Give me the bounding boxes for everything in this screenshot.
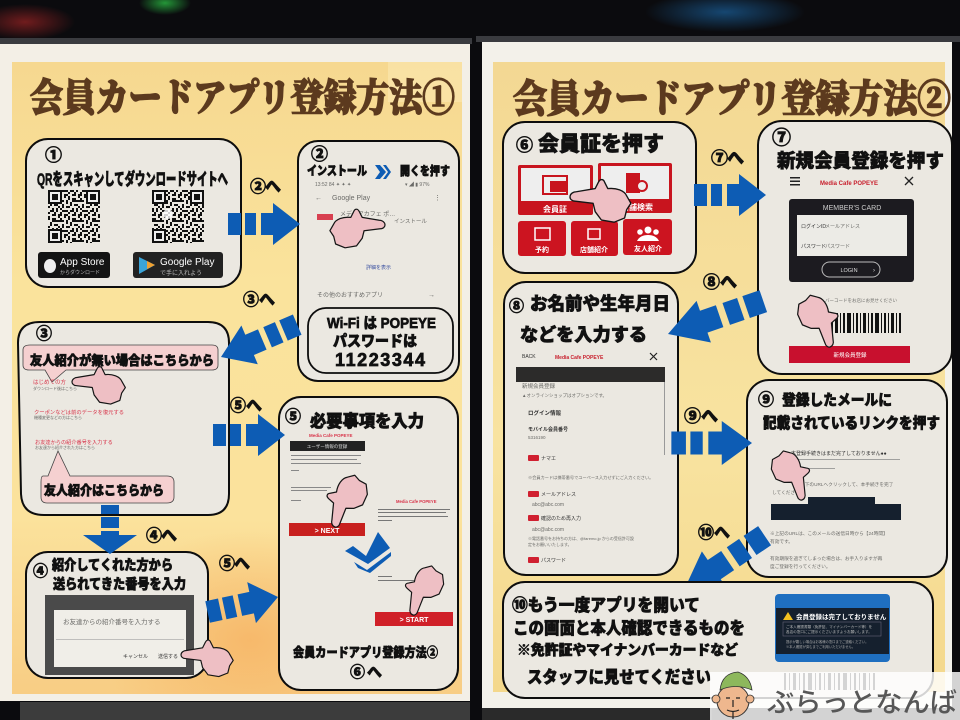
- label: to step 3: ③へ: [243, 291, 275, 309]
- registration form: abc@abc.com: [532, 502, 564, 508]
- app header: [790, 177, 913, 187]
- member card login: パスワード: [825, 244, 850, 250]
- arrow: to step 5 from step 3: [213, 414, 285, 456]
- hand pointer: start: [399, 561, 447, 621]
- heading: press open: 開くを押す: [400, 163, 450, 178]
- hand pointer: [330, 209, 385, 248]
- registration form: 定をお願いいたします。: [528, 541, 572, 547]
- badge: Google Play: Google Play: [160, 257, 214, 268]
- arrow: to step 9: [671, 421, 752, 465]
- registration form: ナマエ: [541, 456, 556, 462]
- dialog screenshot: 送信する: [158, 653, 178, 660]
- arrow: to step 8: [661, 280, 770, 355]
- hand pointer: [72, 367, 125, 404]
- menu list: クーポンなどは前のデータを復元する: [34, 408, 124, 416]
- label: to step 4: ④へ: [146, 527, 177, 545]
- label: to step 5: ⑤へ: [230, 397, 262, 415]
- registration form: 確認のため再入力: [541, 515, 581, 522]
- step number 9: ⑨: [758, 391, 774, 409]
- registration form: ※会員カードは携帯番号でユーペース入力せずにご入力ください。: [528, 474, 653, 481]
- QR code: App Store: [48, 190, 100, 243]
- screenshot: Google Play: インストール: [394, 218, 427, 225]
- registration form: ログイン情報: [528, 409, 562, 417]
- step number 2: ②: [311, 145, 328, 164]
- registration form: 5316190: [528, 435, 546, 440]
- screenshot: Google Play: 13:52 84 ✦ ✦ ✦: [315, 182, 351, 188]
- callout: friend referral: 友人紹介はこちらから: [44, 483, 164, 498]
- heading: enter name: お名前や生年月日: [530, 293, 670, 314]
- screenshot: user form: Media Cafe POPEYE: [309, 433, 353, 438]
- screenshot: Google Play: [315, 182, 441, 299]
- member card login: LOGIN: [840, 268, 858, 274]
- blue card: registration incomplete: 各店の窓口にご提示くださいますようお願いします。: [786, 629, 872, 634]
- panel 9: press email link: [747, 380, 947, 577]
- email screenshot: ●●本登録手続きはまだ完了しておりません●●: [785, 450, 887, 457]
- callout: Wi-Fi password: 11223344: [335, 350, 425, 370]
- registration form: メールアドレス: [541, 492, 576, 498]
- link label: to step 6: ⑥へ: [350, 664, 382, 681]
- dialog screenshot: キャンセル: [123, 654, 148, 660]
- callout: Wi-Fi password: Wi-Fi は POPEYE: [327, 315, 436, 332]
- text: show screen and ID: この画面と本人確認できるものを: [513, 618, 745, 638]
- callout: friend referral: [41, 451, 174, 503]
- heading: enter required fields: 必要事項を入力: [310, 411, 424, 431]
- registration form: モバイル会員番号: [528, 426, 568, 433]
- QR code: Google Play: [152, 190, 204, 243]
- icon: blue chevrons: [375, 165, 391, 179]
- app header: Media Cafe POPEYE: [555, 355, 604, 361]
- heading: enter referral number: 紹介してくれた方から: [52, 557, 173, 573]
- screenshot: Google Play: メディアカフェ ポ…: [340, 210, 395, 218]
- member card login: ログインID: [801, 223, 826, 230]
- app header: BACK: [522, 354, 536, 360]
- registration form: 新規会員登録: [522, 382, 556, 390]
- menu list: はじめての方: [33, 378, 67, 386]
- text: ID examples: ※免許証やマイナンバーカードなど: [517, 642, 738, 658]
- heading: scan QR: QRをスキャンしてダウンロードサイトへ: [37, 169, 228, 189]
- screenshot: start form: Media Cafe POPEYE: [396, 499, 437, 504]
- member card login: [789, 199, 914, 282]
- step number 5: ⑤: [285, 408, 301, 426]
- registration form: ▲オンラインショップはオプションです。: [522, 392, 607, 399]
- menu: store search: 店舗検索: [621, 202, 653, 212]
- button: new registration: [789, 346, 910, 363]
- menu: reservation: 予約: [535, 245, 549, 254]
- callout: Wi-Fi password: [308, 308, 453, 373]
- screenshot: Google Play: 詳細を表示: [366, 264, 391, 271]
- email screenshot: 以下のURLへクリックして、本手続きを完了: [800, 481, 894, 488]
- member card login: ›: [873, 268, 875, 274]
- arrow: to step 2: [228, 203, 300, 245]
- icon: mascot face: [712, 672, 754, 719]
- badge: App Store: からダウンロード: [60, 269, 100, 276]
- label: to step 2: ②へ: [250, 178, 281, 196]
- member card login: パスワード: [801, 244, 826, 250]
- heading: reopen the app: ⑩もう一度アプリを開いて: [512, 595, 700, 615]
- registration form: ※電話番号をお持ちの方は、@faremo.jp からの受信許可設: [528, 535, 634, 541]
- sheet 2 paper: [482, 42, 952, 708]
- logo text: ぶらっとなんば: [767, 688, 957, 718]
- panel 6: press member card: [503, 122, 696, 273]
- app header: [516, 353, 665, 455]
- label: to step 9: ⑨へ: [684, 407, 718, 426]
- menu: store info: [571, 221, 618, 256]
- arrow: to step 7: [694, 174, 766, 216]
- screenshot: Google Play: ▾ ◢ ▮ 97%: [405, 182, 430, 188]
- email screenshot: してください。: [772, 489, 805, 496]
- panel 8: enter name and birthday: などを入力する: [520, 324, 647, 345]
- step number 8: ⑧: [509, 298, 524, 315]
- dialog screenshot: [45, 595, 194, 675]
- menu list: ダウンロード後はこちら: [33, 385, 77, 391]
- email screenshot: 有効期限を過ぎてしまった場合は、お手入りますが再: [770, 555, 883, 562]
- menu list: お友達から紹介された方はこちら: [35, 444, 95, 450]
- hand pointer: [794, 290, 845, 353]
- email screenshot: ※上記のURLは、このメールの送信日時から【24時間】: [770, 530, 888, 537]
- screenshot: start form: > START: [400, 617, 429, 624]
- screenshot: Google Play: Google Play: [332, 195, 371, 202]
- panel 8: enter name and birthday: [504, 282, 678, 575]
- menu list: [33, 378, 124, 450]
- step number 4: ④: [33, 563, 48, 580]
- hand pointer: next: [320, 470, 371, 533]
- arrow: to step 3: [213, 305, 305, 376]
- callout: no referral: [23, 345, 218, 382]
- menu: store info: 店舗紹介: [580, 245, 608, 254]
- heading: press member card: 会員証を押す: [538, 133, 664, 156]
- hand pointer: [181, 640, 233, 677]
- step number 6: ⑥: [516, 136, 533, 155]
- blue card: registration incomplete: [775, 594, 890, 662]
- label: to step 10: ⑩へ: [698, 524, 730, 542]
- menu: member card: 会員証: [543, 204, 567, 214]
- hand pointer: [768, 446, 816, 506]
- sheet 1 paper: [0, 44, 470, 720]
- title: registration method 1: 会員カードアプリ登録方法①: [30, 78, 455, 120]
- badge: Google Play: [133, 252, 223, 278]
- email screenshot: [770, 450, 901, 570]
- menu: member card: [518, 165, 593, 215]
- barcode: [825, 297, 901, 333]
- icon: down chevrons: [345, 532, 391, 573]
- member card login: メールアドレス: [825, 224, 860, 230]
- callout: Wi-Fi password: パスワードは: [333, 332, 417, 350]
- email screenshot: 有効です。: [770, 538, 793, 545]
- step number 7: ⑦: [772, 127, 791, 149]
- panel 1: QR scan: [26, 139, 241, 287]
- screenshot: Google Play: ←: [315, 195, 322, 202]
- screenshot: Google Play: その他のおすすめアプリ: [317, 291, 383, 299]
- blue card: registration incomplete: ※本人確認が済むまでご利用いただけません。: [786, 644, 855, 649]
- step number 1: ①: [45, 146, 62, 165]
- blue card: registration incomplete: 会員登録は完了しておりません: [796, 612, 887, 621]
- menu list: お友達からの紹介番号を入力する: [35, 438, 113, 446]
- registration form: abc@abc.com: [532, 527, 564, 533]
- member card login: MEMBER'S CARD: [823, 205, 881, 212]
- email screenshot: 度ご登録を行ってください。: [770, 563, 831, 570]
- barcode: faded: [784, 673, 875, 690]
- badge: App Store: [38, 252, 110, 278]
- hand pointer: [570, 180, 631, 222]
- dialog screenshot: お友達からの紹介番号を入力する: [63, 617, 160, 626]
- blue card: registration incomplete: ご本人確認書類（免許証、マイナンバーカード等）を: [786, 624, 873, 629]
- menu: friend referral: [623, 219, 672, 255]
- arrow: to step 5 from step 4: [203, 576, 282, 633]
- panel 2: install: [298, 141, 459, 381]
- panel 10: show the screen to staff: [503, 582, 933, 698]
- link: next sheet: 会員カードアプリ登録方法②: [293, 645, 438, 660]
- badge: App Store: App Store: [60, 257, 105, 268]
- panel 4: enter number: 送られてきた番号を入力: [53, 576, 186, 592]
- heading: press link in email: 登録したメールに: [782, 391, 892, 409]
- menu: reservation: [518, 221, 566, 256]
- screenshot: user form: [289, 433, 365, 536]
- panel 4: enter number: [26, 552, 233, 678]
- menu list: 機種変更などの方はこちら: [34, 414, 82, 420]
- registration form: [522, 382, 653, 564]
- screenshot: user form: > NEXT: [315, 528, 340, 535]
- menu: store search: [598, 163, 672, 213]
- arrow: to step 10: [672, 517, 777, 608]
- menu: friend referral: 友人紹介: [634, 244, 662, 253]
- label: to step 7: ⑦へ: [711, 149, 744, 168]
- watermark: brand logo: [710, 672, 960, 720]
- barcode: バーコードをお店にお見せください: [825, 297, 897, 304]
- label: to step 5 from step 4: ⑤へ: [219, 555, 250, 573]
- text: show to staff: スタッフに見せてください: [527, 668, 711, 687]
- registration form: パスワード: [541, 558, 566, 564]
- screenshot: Google Play: →: [428, 292, 435, 299]
- button: new registration: 新規会員登録: [833, 351, 867, 359]
- heading: press new registration: 新規会員登録を押す: [777, 149, 944, 172]
- blue card: registration incomplete: 提示が難しい場合はお客様の窓口までご連絡ください。: [786, 639, 868, 644]
- step number 3: ③: [36, 325, 52, 343]
- panel 3: friend referral choice: [18, 322, 229, 515]
- arrow: to step 4: [83, 505, 137, 554]
- heading: install: インストール: [307, 164, 367, 178]
- panel 7: new member registration: [758, 121, 952, 374]
- panel 5: required info: [279, 397, 458, 690]
- screenshot: Google Play: ⋮: [434, 195, 441, 202]
- screenshot: user form: ユーザー情報の登録: [307, 443, 348, 450]
- screenshot: start form: [375, 499, 453, 626]
- badge: Google Play: で手に入れよう: [160, 269, 202, 277]
- panel 9: press email link: 記載されているリンクを押す: [763, 414, 940, 432]
- app header: Media Cafe POPEYE: [820, 181, 878, 187]
- label: to step 8: ⑧へ: [703, 273, 737, 292]
- callout: no referral: 友人紹介が無い場合はこちらから: [30, 353, 214, 368]
